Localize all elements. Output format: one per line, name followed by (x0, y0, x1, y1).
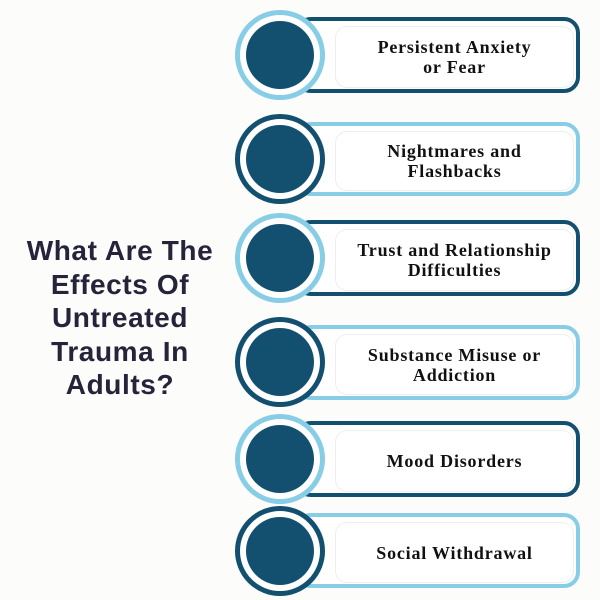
item: mood: Mood Disorders (387, 451, 522, 471)
title (26, 235, 213, 400)
item: trust: Difficulties (408, 260, 501, 280)
item: substance: Addiction (413, 364, 496, 384)
item: persistent anxiety (235, 10, 580, 100)
title: Adults? (66, 369, 174, 400)
item: social withdrawal: Social Withdrawal (376, 542, 533, 562)
item: social withdrawal (235, 506, 580, 596)
item: nightmares: Flashbacks (407, 161, 502, 181)
title: What Are The (27, 235, 213, 266)
title: Trauma In (51, 336, 189, 366)
item: persistent anxiety: or Fear (423, 57, 486, 77)
item: trust (235, 213, 580, 303)
item: persistent anxiety: Persistent Anxiety (378, 37, 531, 57)
item: substance (235, 317, 580, 407)
item: nightmares (235, 114, 580, 204)
item: trust: Trust and Relationship (357, 240, 552, 260)
item: mood (235, 414, 580, 504)
item: substance: Substance Misuse or (368, 344, 541, 364)
title: Untreated (52, 302, 188, 333)
item: nightmares: Nightmares and (387, 141, 522, 161)
title: Effects Of (51, 268, 189, 300)
